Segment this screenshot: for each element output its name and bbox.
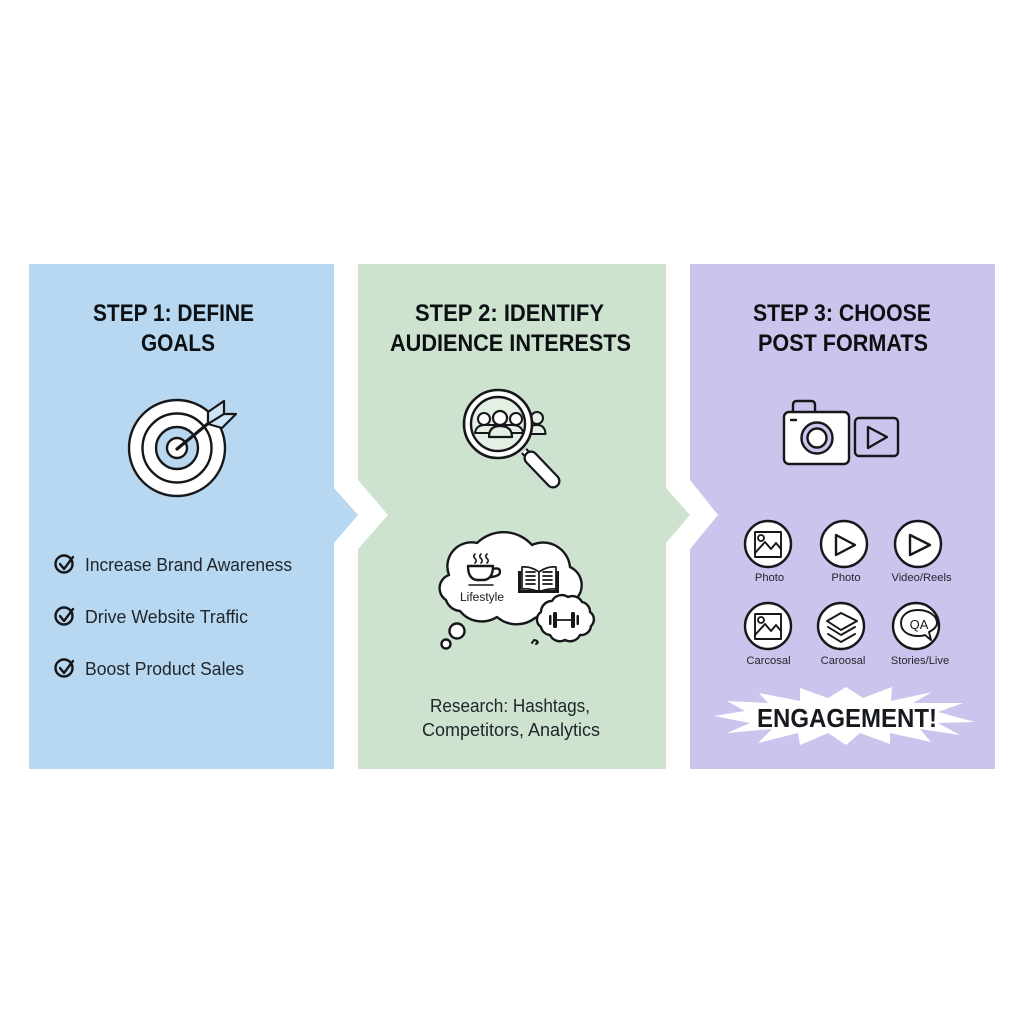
- heading: step 1: [93, 300, 254, 357]
- icon: camera and video: [784, 401, 898, 464]
- format: photo play: [821, 521, 867, 584]
- heading: step 1: GOALS: [141, 330, 215, 357]
- format: stories live: [891, 603, 949, 667]
- heading: step 1: STEP 1: DEFINE: [93, 300, 254, 327]
- panel: step 1 define goals: [29, 264, 358, 769]
- format: video reels: [891, 521, 952, 584]
- icon: thought cloud of interests: [440, 532, 594, 648]
- format: carousel layers: Caroosal: [821, 655, 865, 667]
- item: drive website traffic: Drive Website Traffic: [85, 607, 248, 627]
- icon: magnifier over audience: [464, 390, 553, 481]
- heading: step 3: POST FORMATS: [758, 330, 928, 357]
- icon: open book: [518, 567, 559, 593]
- format: carousel image: [745, 603, 791, 667]
- checklist: goals: [56, 555, 292, 679]
- format: carousel layers: [818, 603, 865, 667]
- format: stories live: QA: [910, 617, 929, 632]
- format: stories live: Stories/Live: [891, 655, 949, 667]
- item: increase brand awareness: Increase Brand Awareness: [85, 555, 292, 575]
- callout: engagement burst: ENGAGEMENT!: [757, 703, 937, 733]
- icon: coffee cup: [468, 554, 500, 585]
- text: research: Research: Hashtags,: [430, 696, 590, 716]
- text: research: [422, 696, 600, 740]
- heading: step 3: STEP 3: CHOOSE: [753, 300, 931, 327]
- icon: dumbbell: [549, 612, 579, 628]
- format: photo: Photo: [755, 572, 784, 584]
- callout: engagement burst: [714, 687, 975, 745]
- format grid: [745, 521, 952, 667]
- heading: step 2: [390, 300, 631, 357]
- item: boost product sales: Boost Product Sales: [85, 659, 244, 679]
- icon: target with arrow: [129, 400, 236, 496]
- label: lifestyle: Lifestyle: [460, 592, 504, 604]
- format: photo play: Photo: [831, 572, 861, 584]
- format: video reels: Video/Reels: [891, 572, 952, 584]
- heading: step 3: [753, 300, 931, 357]
- format: carousel image: Carcosal: [746, 655, 791, 667]
- panel: step 3 choose post formats: [690, 264, 995, 769]
- format: photo: [745, 521, 791, 584]
- heading: step 2: AUDIENCE INTERESTS: [390, 330, 631, 357]
- panel: step 2 identify audience interests: [358, 264, 690, 769]
- text: research: Competitors, Analytics: [422, 720, 600, 740]
- heading: step 2: STEP 2: IDENTIFY: [415, 300, 604, 327]
